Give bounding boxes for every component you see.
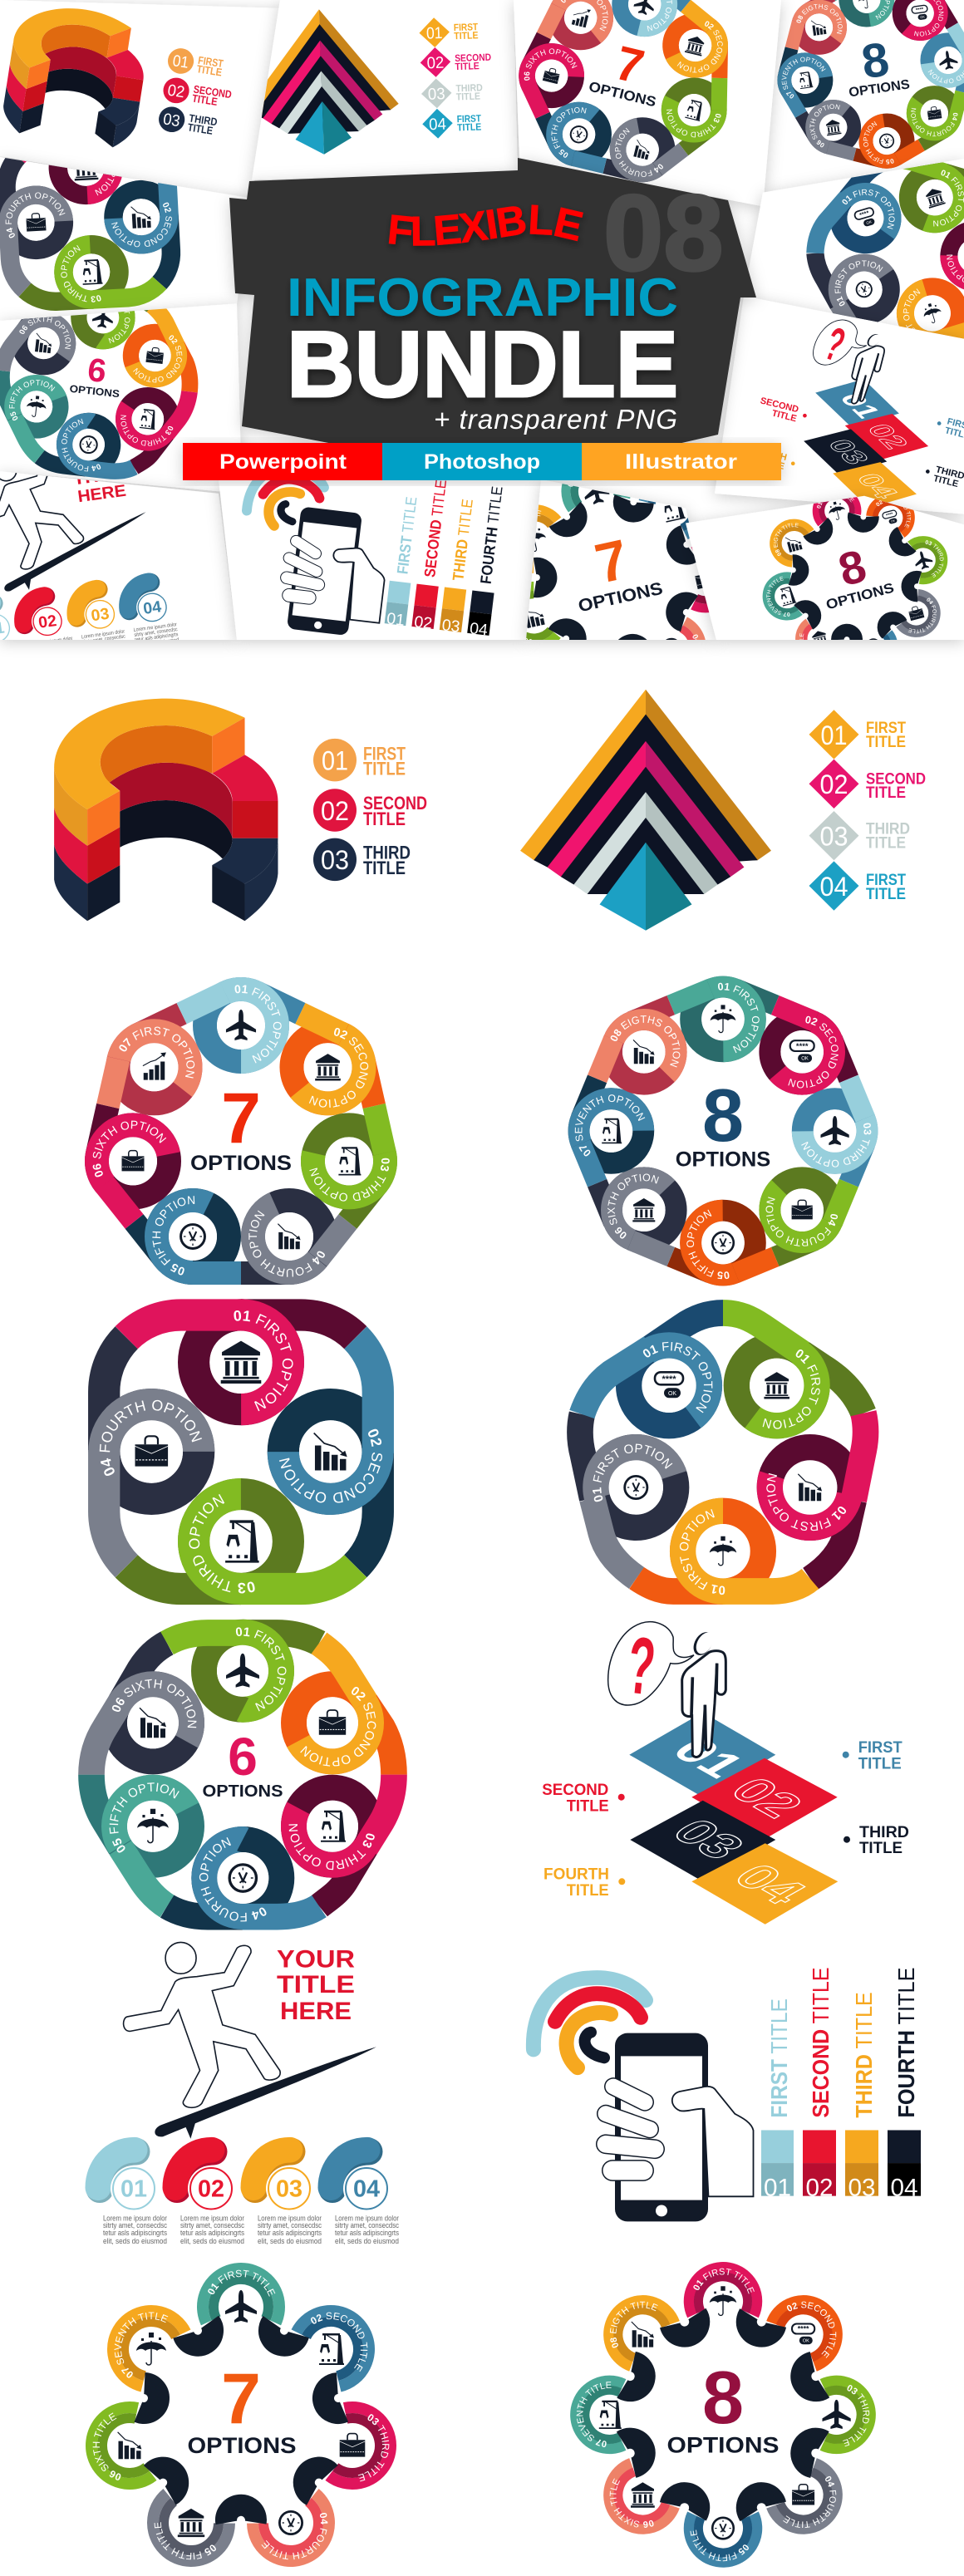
ring 06: 06 SIXTH OPTION: [111, 1679, 196, 1728]
ring 03: 03 THIRD OPTION: [309, 1158, 390, 1202]
ring 05: [680, 1200, 780, 1286]
legend item 03: TITLE: [363, 858, 406, 878]
card: pyramid thumbnail: [243, 0, 518, 180]
ring 03: [748, 1413, 866, 1550]
ring 03: [301, 1104, 397, 1210]
ring 03: [791, 1075, 878, 1174]
ring 02: 02 SECOND OPTION: [279, 1429, 382, 1502]
legend item 01: TITLE: [866, 733, 906, 751]
ring 04: [241, 1188, 357, 1285]
petal 05: [144, 2484, 230, 2576]
petal 05: 05 FIFTH TITLE: [155, 2522, 216, 2559]
ring 03: 01 FIRST OPTION: [766, 1472, 846, 1531]
lorem text 04: Lorem me ipsum dolor: [335, 2214, 399, 2223]
legend item 01: FIRST: [866, 719, 906, 737]
legend item 03: [809, 811, 910, 860]
legend item 02: 02: [819, 769, 848, 799]
legend item 03: TITLE: [866, 834, 906, 852]
bar 04: 04: [891, 2175, 917, 2202]
ring 02: [721, 1313, 839, 1448]
lorem text 04: sitrty amet, consecdsc: [335, 2221, 399, 2230]
legend item 03: [313, 838, 411, 881]
heading: flexible: FLEXIBLE: [389, 204, 583, 250]
step 03: [630, 1801, 775, 1881]
label: third title: THIRD: [859, 1824, 909, 1841]
card: isometric steps thumbnail: [715, 296, 964, 528]
panel: isometric steps with person: [542, 1620, 909, 1925]
petal 01: 01 FIRST TITLE: [208, 2270, 276, 2297]
ring 01: [666, 976, 766, 1062]
legend item 02: SECOND: [363, 793, 427, 814]
lorem text 03: [258, 2214, 322, 2246]
connecting tabs: [581, 989, 865, 1273]
petal 04: [760, 2451, 851, 2543]
center number 8: 8: [702, 2357, 744, 2440]
petal 02: [760, 2287, 850, 2378]
label: second title: [542, 1782, 625, 1815]
petal 03: 03 THIRD TITLE: [826, 2382, 881, 2453]
center label: OPTIONS: [203, 1782, 283, 1801]
bar 03: 03: [848, 2175, 875, 2202]
ring 01: [115, 1299, 304, 1426]
petal 06: [599, 2451, 686, 2539]
step 01: [98, 2150, 157, 2211]
panel: 3D arch with three titles: [54, 699, 427, 921]
step 02: [175, 2150, 234, 2211]
hand: [606, 2087, 753, 2196]
heading: HERE: [280, 1998, 352, 2025]
ring 04: 04 FOURTH OPTION: [248, 1210, 325, 1277]
lorem text 02: sitrty amet, consecdsc: [180, 2221, 244, 2230]
ring 03: [178, 1478, 367, 1605]
ring 02: [279, 1643, 395, 1786]
petal 03: 03 THIRD TITLE: [357, 2414, 389, 2481]
lorem text 01: Lorem me ipsum dolor: [103, 2214, 167, 2223]
ring 04: [76, 1376, 207, 1566]
petal 07: [96, 2295, 198, 2396]
connecting tabs: [97, 992, 377, 1273]
card: 8 options thumbnail: [777, 0, 964, 169]
legend item 04: [809, 861, 906, 911]
ring 05: [145, 1188, 241, 1285]
dark title plate: [229, 158, 756, 449]
petal 08: 08 EIGTH TITLE: [597, 2291, 668, 2350]
card: phone thumbnail: [213, 480, 530, 649]
lorem text 02: elit, seds do eiusmod: [180, 2237, 244, 2246]
ring 07: [568, 1088, 655, 1187]
ring 05: [674, 1506, 810, 1600]
step 03: [253, 2150, 312, 2211]
label: first title: TITLE: [858, 1755, 902, 1772]
petal 04: 04 FOURTH TITLE: [777, 2474, 851, 2543]
legend item 03: THIRD: [363, 842, 411, 863]
center label: OPTIONS: [666, 2432, 780, 2457]
ring 06: 06 SIXTH OPTION: [93, 1120, 166, 1177]
step 02: 02: [198, 2176, 224, 2203]
petal 01: [190, 2256, 292, 2357]
legend item 02: [313, 789, 427, 832]
ring 02: [279, 1003, 376, 1115]
number 08: 08: [603, 172, 724, 293]
card: eight flower thumbnail: [681, 493, 964, 649]
heading: infographic: INFOGRAPHIC: [287, 267, 678, 327]
signal arcs: [534, 1978, 646, 2067]
heading: [277, 1946, 355, 2025]
lorem text 02: tetur asls adipiscingrts: [180, 2229, 244, 2238]
format bar: Illustrator: [625, 450, 737, 474]
dark joints: [128, 2310, 358, 2538]
ring 01: 01 FIRST OPTION: [234, 985, 282, 1064]
connecting tabs: [104, 1315, 378, 1589]
legend item 03: 03: [321, 844, 349, 875]
heading: bundle: BUNDLE: [287, 312, 678, 416]
legend item 02: TITLE: [866, 784, 906, 802]
step 01: [629, 1713, 775, 1797]
label: first title: FIRST: [858, 1739, 903, 1757]
step 02: [691, 1758, 838, 1839]
lorem text 03: elit, seds do eiusmod: [258, 2237, 322, 2246]
vertical title 01: FIRST TITLE: [766, 1998, 792, 2118]
ring 07: 07 FIRST OPTION: [119, 1027, 194, 1079]
lorem text 01: sitrty amet, consecdsc: [103, 2221, 167, 2230]
center number 7: 7: [221, 2359, 261, 2439]
card: six options thumbnail: [0, 274, 242, 494]
pyramid shape: [520, 690, 771, 931]
petal 01: 01 FIRST TITLE: [693, 2269, 755, 2293]
label: fourth title: TITLE: [567, 1882, 609, 1900]
petal 01: [678, 2256, 768, 2347]
lorem text 04: tetur asls adipiscingrts: [335, 2229, 399, 2238]
step 02: 02: [718, 1770, 815, 1825]
connecting tabs: [91, 1633, 394, 1917]
legend item 01: TITLE: [363, 759, 406, 779]
ring 02: [268, 1326, 394, 1515]
legend item 03: THIRD: [866, 820, 910, 838]
ring 01: 01 FIRST OPTION: [643, 1341, 713, 1413]
vertical title 02: SECOND TITLE: [808, 1968, 834, 2118]
step 04: [691, 1843, 838, 1925]
lorem text 04: elit, seds do eiusmod: [335, 2237, 399, 2246]
legend item 02: TITLE: [363, 809, 406, 829]
ring 03: 03 THIRD OPTION: [289, 1824, 375, 1870]
ring 07: 07 SEVENTH OPTION: [575, 1094, 645, 1157]
ring 07: [96, 1019, 203, 1115]
ring 06: 06 SIXTH OPTION: [607, 1173, 659, 1239]
lorem text 02: Lorem me ipsum dolor: [180, 2214, 244, 2223]
ring 01: [176, 977, 289, 1074]
step 04: [331, 2150, 390, 2211]
petal 03: [307, 2400, 406, 2491]
ring 05: 05 FIFTH OPTION: [152, 1196, 194, 1275]
petal 05: [678, 2483, 768, 2576]
label: third title: TITLE: [859, 1840, 903, 1857]
legend item 02: 02: [321, 795, 349, 826]
lorem text 04: [335, 2214, 399, 2246]
card: 7 options thumbnail: [493, 0, 781, 206]
ring 05: 05 FIFTH OPTION: [110, 1782, 180, 1853]
panel: 7 options ring: [85, 977, 397, 1285]
petal 07: [564, 2369, 655, 2460]
center number 7: 7: [221, 1079, 261, 1158]
connecting tabs: [580, 1313, 863, 1591]
legend item 04: TITLE: [866, 885, 906, 903]
lorem text 03: sitrty amet, consecdsc: [258, 2221, 322, 2230]
ring 04: 04 FOURTH OPTION: [100, 1399, 202, 1476]
ring 01: 01 FIRST OPTION: [234, 1310, 293, 1411]
petal 07: 07 SEVENTH TITLE: [115, 2312, 168, 2378]
step 04: 04: [353, 2176, 380, 2203]
legend item 01: FIRST: [363, 744, 406, 764]
lorem text 03: tetur asls adipiscingrts: [258, 2229, 322, 2238]
ring 03: 03 THIRD OPTION: [801, 1123, 871, 1168]
ring 04: [179, 1833, 319, 1942]
petal 05: 05 FIFTH TITLE: [681, 2513, 751, 2576]
panel: phone with signal arcs and bars: [534, 1968, 921, 2221]
bar 03: [845, 2130, 878, 2202]
ring 08: [588, 1009, 687, 1095]
dark joints: [609, 2301, 837, 2529]
ring 04: [577, 1428, 685, 1578]
ring 02: [759, 995, 845, 1095]
bar 04: [888, 2130, 921, 2202]
petal 04: [237, 2469, 345, 2576]
person figure: [682, 1629, 725, 1757]
vertical title 03: THIRD TITLE: [851, 1992, 877, 2118]
petal 08: [597, 2291, 686, 2378]
ring 06: [601, 1167, 687, 1266]
panel: 7 options flower: [76, 2256, 406, 2576]
panel: 8 options ring: [568, 976, 878, 1286]
ring 03: 03 THIRD OPTION: [189, 1494, 255, 1594]
ring 01: [167, 1617, 296, 1715]
hero collage of thumbnails: [0, 0, 964, 650]
bar 02: [803, 2130, 836, 2202]
step 03: 03: [276, 2176, 302, 2203]
lorem text 01: elit, seds do eiusmod: [103, 2237, 167, 2246]
ring 02: 02 SECOND OPTION: [300, 1687, 376, 1767]
petal 06: 06 SIXTH TITLE: [601, 2470, 656, 2539]
center number 6: 6: [228, 1727, 258, 1787]
label: second title: SECOND: [542, 1782, 608, 1799]
ring 02: 02 SECOND OPTION: [788, 1015, 839, 1089]
ring 06: [91, 1666, 209, 1776]
panel: four options ring: [88, 1299, 394, 1605]
card: five options thumbnail: [741, 156, 964, 339]
petal 07: 07 SEVENTH TITLE: [573, 2377, 612, 2449]
lorem text 01: [103, 2214, 167, 2246]
petal 02: 02 SECOND TITLE: [786, 2302, 836, 2358]
label: second title: TITLE: [567, 1797, 609, 1815]
legend item 01: [809, 710, 906, 760]
legend item 04: FIRST: [866, 871, 906, 889]
label: fourth title: [543, 1866, 625, 1900]
petal 02: [279, 2294, 385, 2401]
heading: YOUR: [277, 1946, 355, 1973]
label: first title: [843, 1739, 903, 1772]
legend item 01: 01: [821, 720, 848, 750]
card: surfer thumbnail: [0, 469, 240, 649]
surfer figure and board: [124, 1942, 376, 2139]
legend item 04: 04: [819, 871, 848, 902]
petal 02: 02 SECOND TITLE: [311, 2312, 367, 2372]
card: arch thumbnail: [0, 0, 280, 199]
center label: OPTIONS: [190, 1152, 292, 1175]
center label: OPTIONS: [188, 2433, 296, 2458]
panel: 6 options ring: [88, 1617, 395, 1942]
ring 01: 01 FIRST OPTION: [718, 982, 760, 1054]
ring 08: 08 EIGTHS OPTION: [610, 1015, 680, 1067]
ring 04: 04 FOURTH OPTION: [766, 1197, 838, 1246]
legend item 01: [313, 739, 406, 781]
legend item 02: [809, 760, 926, 809]
petal 04: 04 FOURTH TITLE: [261, 2513, 327, 2559]
panel: five options ring: [577, 1313, 866, 1600]
phone: [615, 2033, 708, 2221]
legend item 03: 03: [819, 821, 848, 851]
step 01: 01: [120, 2176, 147, 2203]
step 03: 03: [660, 1812, 757, 1866]
bar 01: [761, 2130, 794, 2202]
ring 05: [88, 1762, 206, 1906]
format bar: Powerpoint: [219, 450, 347, 474]
label: fourth title: FOURTH: [543, 1866, 609, 1884]
vertical title 04: FOURTH TITLE: [893, 1968, 919, 2118]
panel: layered pyramid with four titles: [520, 690, 926, 931]
ring 04: 01 FIRST OPTION: [593, 1444, 673, 1502]
speech bubble with question mark: ?: [623, 1620, 659, 1712]
ring 05: 05 FIFTH OPTION: [686, 1210, 730, 1280]
petal 06: [76, 2392, 184, 2500]
ring 04: [759, 1167, 858, 1253]
panel: surfer with four steps: [98, 1942, 399, 2246]
speech bubble with question mark: [608, 1620, 694, 1712]
petal 06: 06 SIXTH TITLE: [93, 2412, 121, 2480]
ring 02: 01 FIRST OPTION: [763, 1349, 820, 1429]
ring 02: 02 SECOND OPTION: [309, 1028, 369, 1108]
center label: OPTIONS: [676, 1148, 770, 1172]
format bar: Photoshop: [424, 450, 540, 474]
panel: 8 options flower: [564, 2256, 882, 2576]
card: four options thumbnail: [0, 155, 248, 311]
ring 04: 04 FOURTH OPTION: [199, 1837, 266, 1921]
subheading: transparent PNG: + transparent PNG: [434, 404, 677, 435]
lorem text 02: [180, 2214, 244, 2246]
lorem text 01: tetur asls adipiscingrts: [103, 2229, 167, 2238]
legend item 02: SECOND: [866, 769, 926, 788]
bar 02: 02: [806, 2175, 834, 2202]
ring 01: [582, 1321, 733, 1441]
step 04: 04: [721, 1856, 819, 1911]
arch shape: [54, 699, 278, 921]
legend item 01: 01: [322, 745, 348, 775]
step 01: 01: [660, 1730, 757, 1785]
ring 06: [85, 1113, 181, 1229]
format bar: [183, 443, 781, 480]
bar 01: 01: [764, 2175, 791, 2202]
lorem text 03: Lorem me ipsum dolor: [258, 2214, 322, 2223]
ring 01: 01 FIRST OPTION: [236, 1627, 286, 1712]
heading: TITLE: [277, 1971, 355, 1998]
petal 03: [791, 2369, 882, 2460]
ring 05: 01 FIRST OPTION: [680, 1509, 725, 1595]
ring 03: [279, 1773, 394, 1880]
label: third title: [844, 1824, 909, 1857]
center number 8: 8: [702, 1074, 744, 1158]
card: seven flower thumbnail: [520, 480, 719, 649]
